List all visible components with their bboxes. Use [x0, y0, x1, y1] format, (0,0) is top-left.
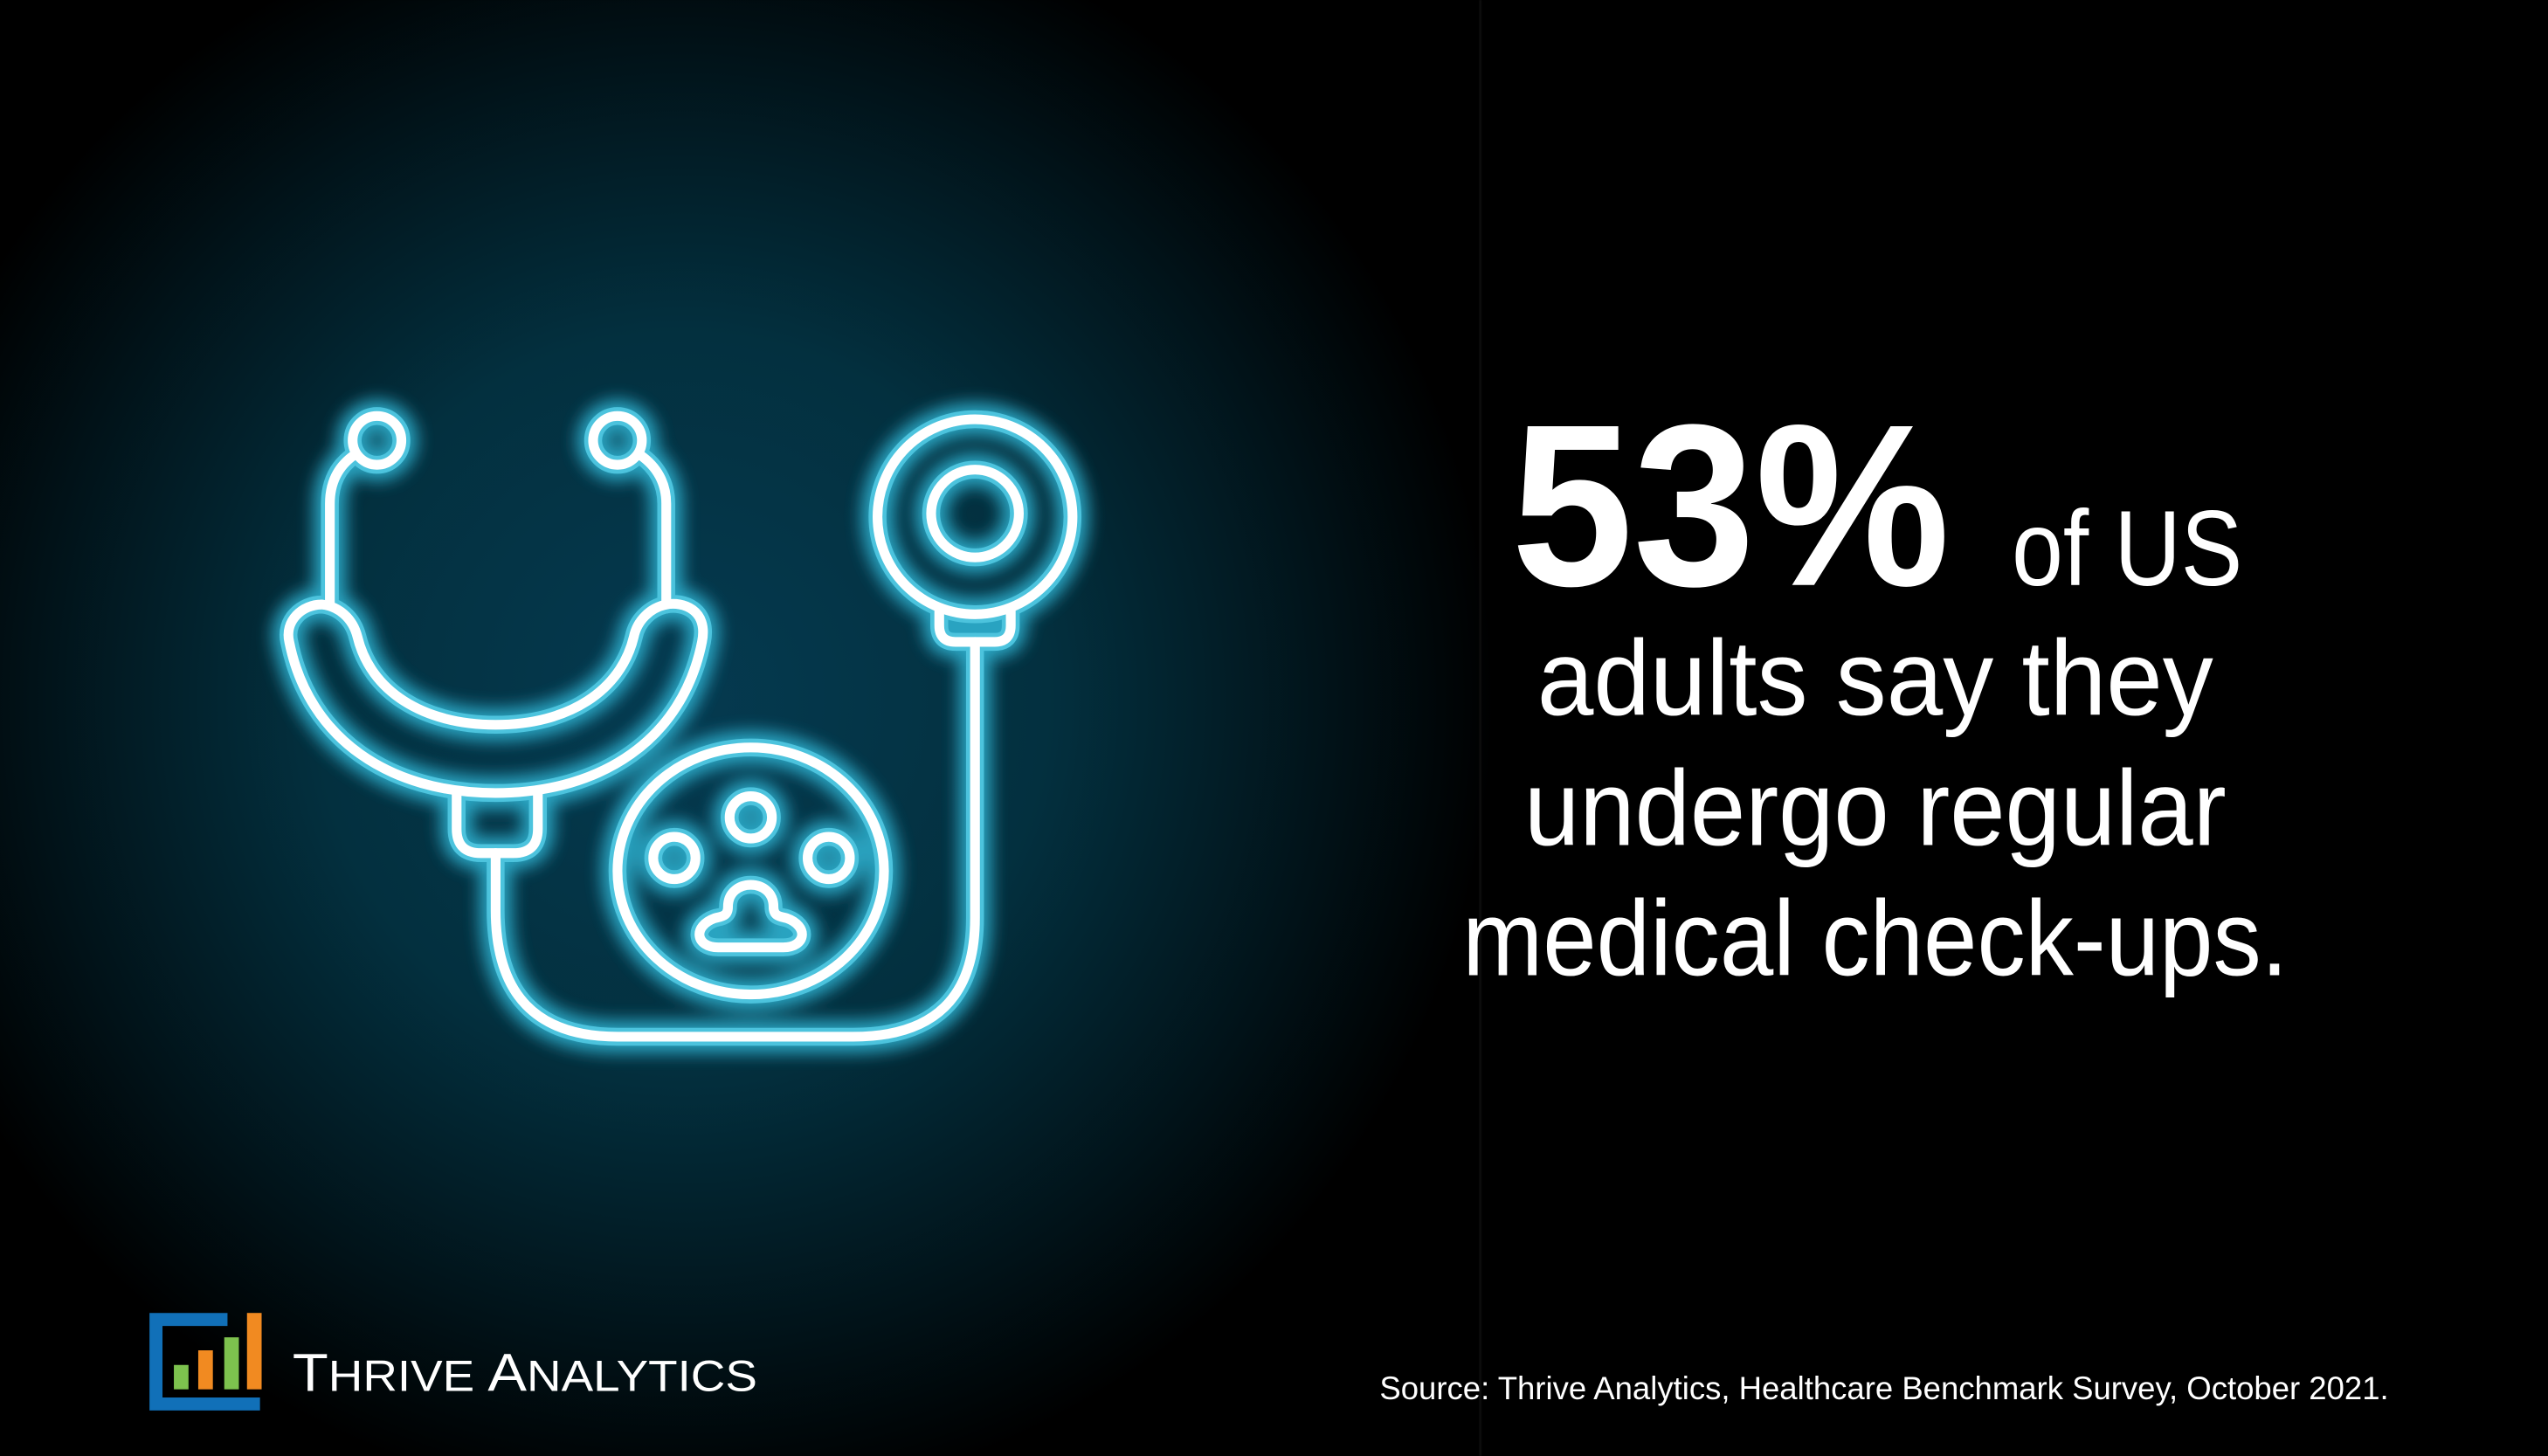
logo: Thrive Analytics: THRIVE ANALYTICS	[293, 1343, 757, 1404]
statement text: of US	[2012, 489, 2242, 609]
statement text: undergo regular	[1524, 749, 2227, 868]
logo: Thrive Analytics	[149, 1313, 757, 1411]
statement text: adults say they	[1537, 619, 2213, 739]
source note: Source: Thrive Analytics, Healthcare Benchmark Survey, October 2021.	[1379, 1370, 2389, 1406]
headline statistic	[1462, 376, 2288, 998]
statement text: medical check-ups.	[1462, 879, 2288, 998]
big number: 53%	[1511, 376, 1950, 634]
icon: stethoscope with paw	[288, 416, 1073, 1037]
statement text	[1462, 489, 2288, 998]
